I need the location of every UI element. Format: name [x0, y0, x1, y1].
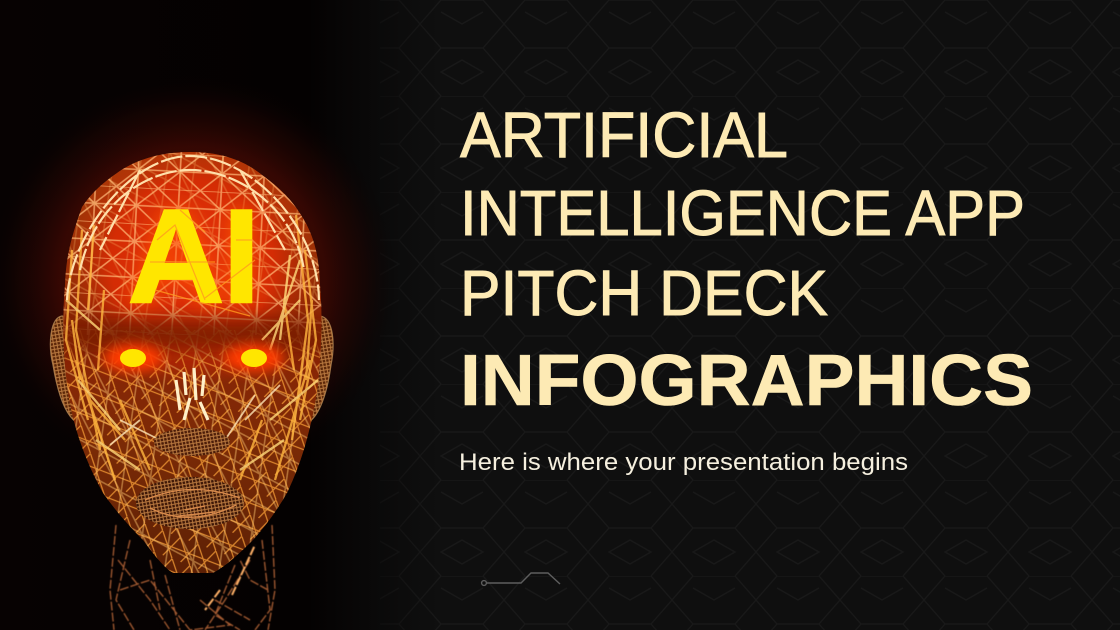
forehead red glow [75, 152, 309, 381]
AI glow: I [222, 181, 260, 332]
head red halo [0, 0, 400, 630]
upper cross mesh [63, 152, 322, 328]
strands over letters [150, 210, 255, 316]
left ear [50, 316, 84, 422]
title line 3: PITCH DECK [460, 257, 828, 329]
lower cross mesh [64, 330, 320, 573]
nose texture [154, 428, 230, 456]
left eye [103, 344, 163, 372]
left ear mesh [50, 316, 84, 422]
circuit line decoration [482, 573, 560, 585]
skull rim strands [67, 156, 319, 300]
AI letters: A [128, 183, 224, 331]
AI letters: I [223, 183, 260, 331]
right ear [302, 316, 333, 422]
background hex pattern [380, 0, 1120, 630]
brow shadow [55, 318, 335, 352]
subtitle: Here is where your presentation begins [459, 449, 908, 476]
upper mesh [63, 152, 322, 335]
mouth strands [145, 489, 240, 517]
lower mesh [63, 330, 322, 573]
title line 4: INFOGRAPHICS [460, 341, 1033, 421]
head wireframe [50, 130, 335, 580]
head fill and mesh [63, 152, 322, 573]
title [460, 99, 1033, 421]
center nose bright strands [176, 368, 208, 420]
mouth detail [136, 477, 244, 529]
right ear mesh [302, 316, 333, 422]
neck wireframe [110, 525, 275, 630]
title line 2: INTELLIGENCE APP [460, 177, 1025, 249]
title line 1: ARTIFICIAL [460, 99, 788, 171]
photo panel fade [0, 0, 440, 630]
right eye [224, 344, 284, 372]
AI glow: A [127, 181, 224, 332]
side bright strands [66, 215, 318, 480]
nose detail [154, 428, 230, 456]
mouth texture [136, 477, 244, 529]
